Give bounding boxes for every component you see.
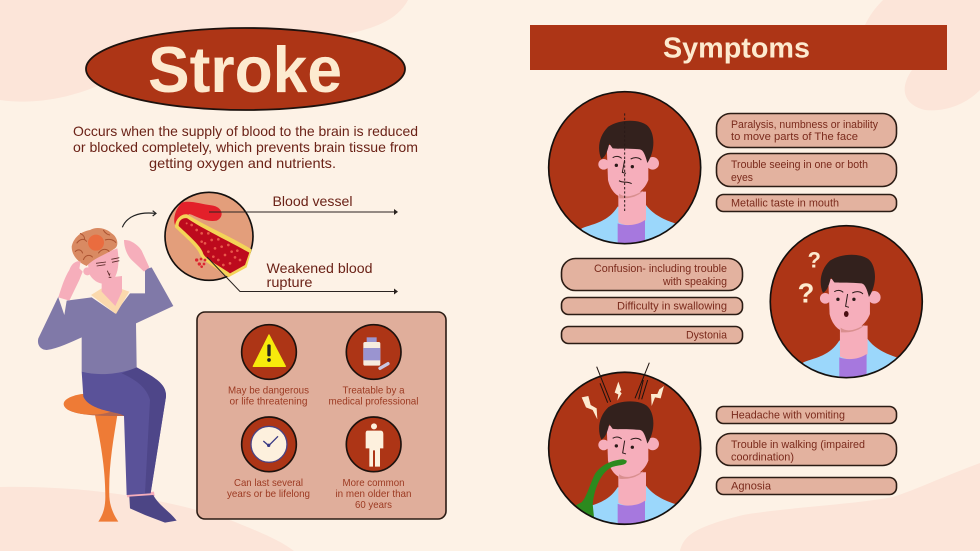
symptom: agnosia xyxy=(716,478,896,494)
icon: man xyxy=(346,417,401,472)
label: blood vessel: Blood vessel xyxy=(272,194,352,209)
text: dangerous: May be dangerous xyxy=(228,384,309,396)
arrow to vessel xyxy=(122,211,156,227)
title: Stroke xyxy=(148,33,342,106)
pain marks xyxy=(582,363,664,419)
question marks: ? xyxy=(798,277,814,308)
symptom: trouble walking: coordination) xyxy=(731,452,794,464)
symptom: dystonia: Dystonia xyxy=(686,330,728,342)
symptom: headache xyxy=(716,406,896,424)
trousers xyxy=(82,367,166,495)
symptom: paralysis xyxy=(716,114,896,148)
text: treatable: Treatable by a xyxy=(342,384,405,396)
portrait: facial paralysis xyxy=(549,92,701,252)
description text: Occurs when the supply of blood to the brain is reduced xyxy=(73,123,418,139)
symptom: headache: Headache with vomiting xyxy=(731,410,845,422)
text: more common: 60 years xyxy=(355,499,392,511)
portrait: confusion xyxy=(770,226,922,386)
symptom: dystonia xyxy=(562,326,742,344)
shoes and socks xyxy=(127,492,177,523)
collar xyxy=(91,288,129,314)
icon: clock xyxy=(242,417,296,472)
heading: symptoms xyxy=(530,25,947,70)
symptom: confusion: with speaking xyxy=(662,276,727,288)
text: dangerous: or life threatening xyxy=(230,396,308,408)
symptom: trouble seeing xyxy=(716,154,896,186)
description text: getting oxygen and nutrients. xyxy=(149,155,336,171)
text: duration: years or be lifelong xyxy=(227,488,310,500)
symptom: trouble seeing: Trouble seeing in one or both xyxy=(731,159,868,171)
label: weakened blood rupture: rupture xyxy=(266,275,312,290)
text: more common: More common xyxy=(342,477,405,489)
stool xyxy=(64,393,125,522)
heading: symptoms: Symptoms xyxy=(663,32,810,64)
symptom: trouble walking: Trouble in walking (impaired xyxy=(731,439,865,451)
label: weakened blood rupture xyxy=(207,257,398,294)
icon: warning xyxy=(242,325,296,379)
description text: or blocked completely, which prevents brain tissue from xyxy=(73,139,418,155)
text: duration xyxy=(227,477,310,500)
symptom: trouble walking xyxy=(716,434,896,466)
text: more common xyxy=(336,477,412,511)
text: duration: Can last several xyxy=(234,477,303,489)
illustration: person with stroke on stool xyxy=(38,211,177,523)
symptom: trouble seeing: eyes xyxy=(731,172,753,184)
panel: facts xyxy=(197,312,446,519)
description text xyxy=(73,123,418,171)
neck and head xyxy=(83,248,122,306)
text: dangerous xyxy=(228,384,309,408)
symptom: agnosia: Agnosia xyxy=(731,480,772,492)
symptom: paralysis: Paralysis, numbness or inability xyxy=(731,119,878,131)
symptom: metallic taste: Metallic taste in mouth xyxy=(731,198,839,210)
brain xyxy=(72,228,117,266)
symptom: difficulty swallowing xyxy=(562,298,742,314)
sweater xyxy=(38,267,173,374)
portrait: headache and vomiting xyxy=(549,372,701,532)
text: treatable xyxy=(328,384,418,408)
title xyxy=(86,28,405,110)
text: more common: in men older than xyxy=(336,488,412,500)
symptom: confusion: Confusion- including trouble xyxy=(594,263,727,275)
symptom: metallic taste xyxy=(716,194,896,212)
question marks: ? xyxy=(808,248,821,273)
symptom: difficulty swallowing: Difficulty in swallowing xyxy=(617,300,727,312)
symptom: confusion xyxy=(562,258,742,290)
blood vessel illustration xyxy=(165,192,253,280)
vomit xyxy=(576,459,627,517)
hands and forearms xyxy=(58,240,149,301)
label: blood vessel xyxy=(209,194,398,215)
symptom: paralysis: to move parts of The face xyxy=(731,131,858,143)
label: weakened blood rupture: Weakened blood xyxy=(266,261,372,276)
text: treatable: medical professional xyxy=(328,396,418,408)
question marks xyxy=(798,248,821,308)
icon: medicine bottle xyxy=(346,325,401,379)
